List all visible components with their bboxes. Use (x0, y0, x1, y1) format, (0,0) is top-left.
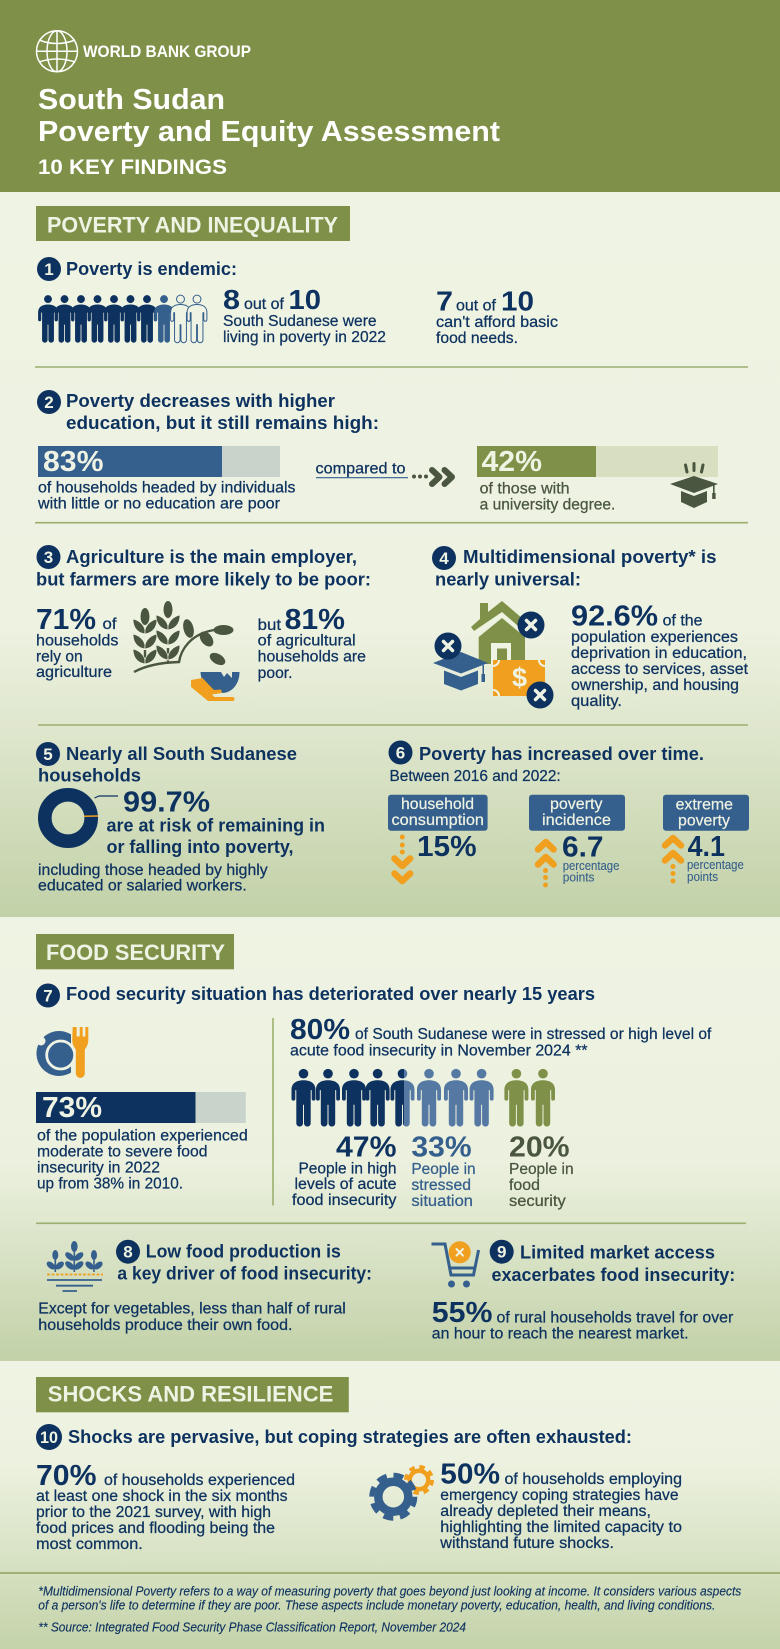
number badge 2 (37, 390, 61, 414)
stat: 20 percent: People in (509, 1161, 574, 1178)
label: household consumption: household (401, 796, 474, 813)
number badge 4 (432, 546, 456, 570)
caption: 83 percent: of households headed by individuals (38, 480, 296, 496)
heading 8: a key driver of food insecurity: (117, 1262, 372, 1283)
panel: finding 7 (36, 983, 712, 1210)
stat: 81 percent: of agricultural (258, 632, 356, 650)
stat: 92.6 percent: population experiences (571, 629, 738, 646)
stat: 20 percent (509, 1132, 574, 1210)
stat: 20 percent: food (509, 1177, 540, 1194)
stat: 8 out of 10 (223, 284, 386, 346)
stat: 7 out of 10: can't afford basic (436, 314, 558, 331)
heading 4: Multidimensional poverty* is (463, 546, 716, 567)
stat: 81 percent: 81% (285, 604, 345, 636)
stat: 7 out of 10: 7 (436, 286, 453, 316)
bar: 73 percent: 73% (42, 1092, 102, 1124)
number badge 5: 5 (43, 745, 53, 764)
heading 4 (435, 546, 716, 590)
stat: 55 percent (432, 1297, 733, 1342)
stat: 20 percent: security (509, 1193, 566, 1210)
title: Poverty and Equity Assessment (38, 116, 500, 148)
footnotes: of a person's life to determine if they are poor. These aspects include monetary poverty, education, health, and living conditions. (38, 1597, 715, 1612)
stat: 92.6 percent: 92.6% (571, 600, 658, 632)
heading 10: Shocks are pervasive, but coping strategies are often exhausted: (68, 1426, 632, 1447)
label: extreme poverty (663, 795, 749, 831)
panel: finding 4 (432, 546, 749, 710)
arrow: compared to (412, 470, 452, 484)
title: South Sudan (38, 84, 225, 116)
stat: 71 percent: rely on (36, 648, 83, 666)
heading 8: Low food production is (146, 1241, 341, 1262)
panel: finding 5 (36, 742, 325, 894)
arrow: poverty incidence up (538, 842, 554, 888)
subtitle: 10 KEY FINDINGS (38, 156, 227, 179)
stat: 92.6 percent: deprivation in education, (571, 645, 747, 662)
number badge 3: 3 (44, 548, 53, 567)
stat: 71 percent: 71% (36, 604, 96, 636)
panel: finding 2 (37, 390, 718, 514)
number badge 4: 4 (439, 549, 449, 568)
number badge 10 (36, 1424, 62, 1450)
stat: 55 percent: an hour to reach the nearest market. (432, 1326, 689, 1342)
section heading: food security (36, 934, 234, 969)
bar: 42 percent: 42% (482, 446, 542, 478)
stat: 47 percent: People in high (298, 1160, 396, 1177)
heading 6: Poverty has increased over time. (419, 743, 704, 764)
stat: 92.6 percent: of the (663, 612, 702, 630)
logo wordmark: WORLD BANK GROUP (83, 42, 251, 61)
heading 4: nearly universal: (435, 568, 581, 590)
footnotes: *Multidimensional Poverty refers to a way of measuring poverty that goes beyond just looking at income. It considers various aspects (38, 1584, 742, 1598)
icon: graduation cap blue (433, 652, 488, 690)
stat: 81 percent: but (258, 617, 282, 634)
panel: finding 9 (432, 1240, 735, 1342)
stat: 8 out of 10: South Sudanese were (223, 313, 377, 330)
stat: 55 percent: of rural households travel for over (496, 1310, 733, 1326)
icon: graduation cap (670, 464, 718, 508)
stat: 70 percent: of households experienced (104, 1472, 295, 1489)
stat: 70 percent: prior to the 2021 survey, with high (36, 1504, 271, 1521)
caption: 73 percent: moderate to severe food (37, 1144, 208, 1160)
stat: 7 out of 10 (436, 286, 558, 347)
stat: 50 percent: of households employing (504, 1471, 682, 1488)
label: poverty incidence (529, 795, 625, 831)
stat: 8 out of 10: 8 (223, 284, 240, 315)
stat: 4.1 percentage points (687, 831, 744, 884)
caption: 73 percent: up from 38% in 2010. (37, 1176, 183, 1192)
stat: 81 percent (258, 604, 366, 682)
label: household consumption: consumption (392, 812, 484, 829)
stat: 55 percent: 55% (432, 1297, 493, 1329)
icon: gears (372, 1467, 432, 1518)
number badge 3 (36, 545, 60, 569)
compared to label: compared to (316, 460, 406, 478)
stat: 70 percent: at least one shock in the six months (36, 1488, 288, 1505)
heading 2 (66, 390, 379, 433)
heading 3: but farmers are more likely to be poor: (36, 568, 371, 590)
number badge 7: 7 (43, 986, 53, 1006)
stat: 70 percent: 70% (36, 1460, 97, 1492)
stat: 47 percent: levels of acute (294, 1176, 396, 1193)
label: poverty incidence: incidence (542, 812, 611, 829)
stat: 8 out of 10: 10 (288, 284, 321, 315)
section heading: shocks and resilience: SHOCKS AND RESILIENCE (48, 1382, 333, 1407)
icon: crops and irrigation (45, 1241, 104, 1291)
number badge 8 (116, 1240, 140, 1264)
panel: finding 6 (388, 740, 749, 888)
subheading 6: Between 2016 and 2022: (390, 768, 561, 785)
background: section two (0, 917, 780, 1361)
heading 9 (492, 1242, 735, 1285)
stat: 33 percent: People in (411, 1161, 476, 1178)
stat: 4.1 percentage points: percentage (687, 858, 744, 872)
pictogram: people by food security status (292, 1069, 555, 1127)
section heading: food security: FOOD SECURITY (46, 940, 225, 965)
stat: 92.6 percent: access to services, asset (571, 661, 749, 678)
section heading: poverty and inequality: POVERTY AND INEQUALITY (47, 212, 338, 238)
stat: 50 percent: highlighting the limited capacity to (440, 1519, 682, 1536)
stat: 99.7 percent: are at risk of remaining in (106, 814, 325, 836)
stat: 50 percent: emergency coping strategies have (440, 1487, 679, 1504)
stat: 71 percent (36, 604, 119, 681)
stat: 33 percent: 33% (411, 1132, 472, 1164)
arrow: extreme poverty up (665, 838, 681, 884)
icon: plate and fork (36, 1027, 88, 1078)
stat: 80 percent (290, 1014, 712, 1060)
heading 5: Nearly all South Sudanese (66, 743, 297, 764)
icon: ten people, eight highlighted (38, 295, 207, 343)
heading 5 (38, 743, 297, 786)
stat: 6.7 percentage points: points (563, 870, 594, 884)
caption: 73 percent (37, 1128, 248, 1192)
number badge 8: 8 (123, 1243, 133, 1262)
number badge 9: 9 (497, 1243, 506, 1262)
stat: 8 out of 10: out of (244, 296, 285, 313)
stat: 7 out of 10: 10 (501, 286, 534, 316)
stat: 80 percent: acute food insecurity in November 2024 ** (290, 1042, 588, 1060)
bar: 73 percent (36, 1092, 246, 1124)
stat: 92.6 percent (571, 600, 749, 710)
stat: 47 percent (292, 1132, 397, 1209)
stat: 80 percent: 80% (290, 1014, 350, 1046)
chart: donut 99.7 percent (45, 795, 118, 841)
number badge 6 (388, 740, 412, 764)
icon: World Bank globe (36, 31, 78, 72)
panel: finding 8 (38, 1240, 372, 1334)
text block 8 (38, 1300, 346, 1334)
label: extreme poverty: extreme (676, 796, 733, 814)
stat: 50 percent (439, 1458, 682, 1552)
stat: 47 percent: 47% (336, 1132, 397, 1164)
stat: 92.6 percent: quality. (571, 693, 622, 710)
stat: 33 percent: situation (411, 1193, 473, 1210)
number badge 2: 2 (44, 393, 54, 412)
panel: finding 1 (37, 257, 558, 347)
number badge 1 (37, 257, 61, 281)
label: household consumption (388, 795, 488, 831)
number badge 6: 6 (396, 744, 405, 762)
text block 8: households produce their own food. (38, 1317, 292, 1334)
heading 7: Food security situation has deteriorated over nearly 15 years (66, 983, 595, 1004)
bar: 42 percent (477, 446, 718, 478)
title (38, 84, 500, 148)
background: section three (0, 1361, 780, 1649)
caption: 42 percent: a university degree. (480, 496, 615, 514)
arrow: household consumption down (394, 834, 410, 881)
heading 3 (36, 546, 371, 590)
icon: money: $ (512, 662, 527, 692)
stat: 4.1 percentage points: 4.1 (688, 831, 725, 863)
icon: wheat and plant (133, 601, 234, 672)
stat: 92.6 percent: ownership, and housing (571, 677, 739, 694)
stat: 20 percent: 20% (509, 1132, 570, 1164)
stat: 33 percent: stressed (411, 1177, 471, 1194)
caption 5: including those headed by highly (38, 862, 268, 879)
stat: 7 out of 10: out of (456, 298, 497, 314)
stat: 6.7 percentage points (562, 832, 619, 884)
caption: 83 percent: with little or no education are poor (37, 496, 280, 512)
stat: 4.1 percentage points: points (687, 870, 718, 884)
caption: 73 percent: of the population experienced (37, 1128, 248, 1144)
stat: 71 percent: of (102, 616, 117, 633)
caption 5 (38, 862, 268, 894)
caption: 42 percent: of those with (480, 480, 570, 498)
heading 2: education, but it still remains high: (66, 412, 379, 433)
stat: 70 percent: most common. (36, 1536, 143, 1553)
stat: 81 percent: households are (258, 648, 366, 666)
stat: 99.7 percent: 99.7% (123, 786, 210, 818)
stat: 8 out of 10: living in poverty in 2022 (223, 329, 386, 346)
stat: 50 percent: withstand future shocks. (439, 1535, 614, 1552)
heading 2: Poverty decreases with higher (66, 390, 335, 411)
heading 9: Limited market access (520, 1242, 715, 1263)
footnotes: ** Source: Integrated Food Security Phase Classification Report, November 2024 (38, 1619, 466, 1634)
stat: 50 percent: 50% (440, 1458, 500, 1490)
stat: 99.7 percent (106, 786, 325, 857)
heading 1: Poverty is endemic: (66, 258, 237, 279)
stat: 50 percent: already depleted their means, (440, 1503, 651, 1520)
heading 3: Agriculture is the main employer, (66, 546, 357, 567)
number badge 5 (36, 742, 60, 766)
background: section one (0, 192, 780, 917)
stat: 99.7 percent: or falling into poverty, (106, 836, 294, 857)
section heading: poverty and inequality (36, 206, 350, 241)
caption 5: educated or salaried workers. (38, 878, 247, 894)
stat: 7 out of 10: food needs. (436, 330, 518, 347)
caption: 42 percent (480, 480, 615, 514)
number badge 7 (36, 984, 60, 1008)
label: poverty incidence: poverty (550, 796, 603, 813)
label: extreme poverty: poverty (678, 812, 730, 830)
caption: 83 percent (37, 480, 296, 512)
caption: 73 percent: insecurity in 2022 (37, 1160, 160, 1176)
stat: 80 percent: of South Sudanese were in stressed or high level of (355, 1026, 712, 1043)
section heading: shocks and resilience (36, 1377, 349, 1412)
panel: finding 10 (36, 1424, 682, 1553)
stat: 70 percent: food prices and flooding being the (36, 1520, 275, 1537)
number badge 10: 10 (40, 1428, 58, 1447)
stat: 33 percent (411, 1132, 476, 1210)
stat: 15 percent: 15% (417, 831, 477, 863)
panel: finding 3 (36, 545, 371, 701)
heading 5: households (38, 764, 141, 786)
text block 8: Except for vegetables, less than half of rural (38, 1300, 346, 1318)
icons: cross badges (434, 612, 554, 708)
stat: 71 percent: households (36, 632, 119, 650)
icon: house (471, 601, 530, 664)
number badge 9 (490, 1240, 514, 1264)
icon: shopping cart (432, 1241, 479, 1288)
bar: 83 percent (38, 446, 280, 478)
stat: 47 percent: food insecurity (292, 1192, 397, 1209)
header banner (0, 0, 780, 192)
bar: 83 percent: 83% (43, 446, 104, 478)
stat: 71 percent: agriculture (36, 664, 112, 681)
heading 9: exacerbates food insecurity: (492, 1264, 735, 1285)
heading 8 (117, 1241, 372, 1283)
icon: money (493, 660, 545, 696)
icon: hand holding bowl (191, 672, 240, 701)
number badge 1: 1 (44, 260, 54, 279)
stat: 70 percent (36, 1460, 295, 1553)
stat: 81 percent: poor. (258, 665, 292, 682)
stat: 6.7 percentage points: 6.7 (562, 832, 604, 864)
stat: 6.7 percentage points: percentage (563, 859, 619, 873)
footnotes (38, 1584, 742, 1634)
